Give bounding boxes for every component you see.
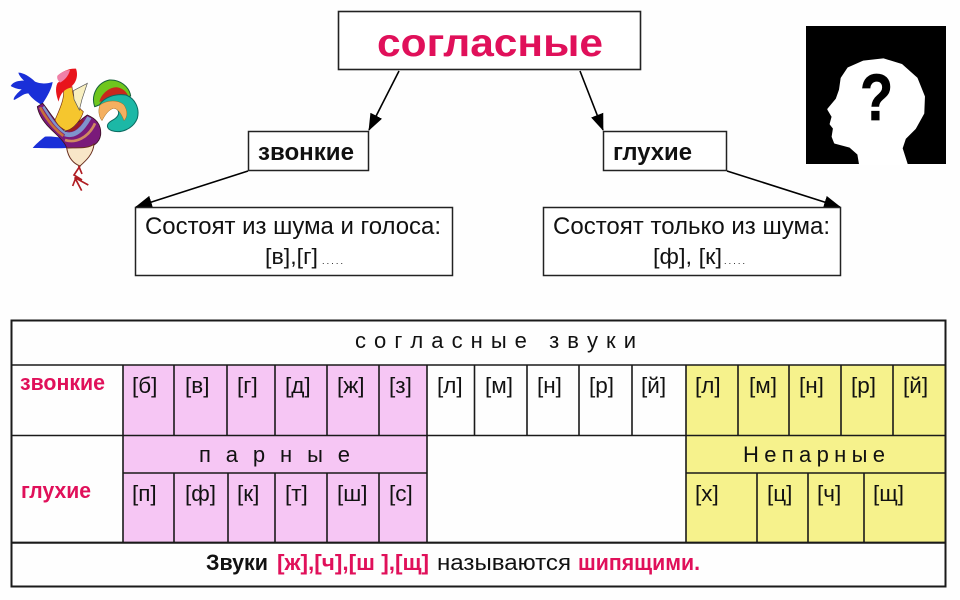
icon: rooster	[11, 69, 138, 191]
box: voiceless description: Состоят только из шума:	[553, 213, 830, 240]
voiced consonants row: [й]	[641, 373, 666, 398]
voiceless consonants row	[132, 481, 904, 506]
voiceless consonants row: [ц]	[767, 481, 792, 506]
title box: согласные	[377, 22, 603, 65]
box: voiced heading: звонкие	[258, 139, 354, 166]
arrow: voiced to description	[136, 171, 248, 207]
row label: voiced: звонкие	[20, 370, 105, 395]
footer note	[206, 550, 700, 575]
arrow: title to voiced	[369, 71, 399, 130]
yellow unpaired cells	[686, 365, 946, 543]
box: voiceless heading	[604, 132, 726, 170]
voiced consonants row: [ж]	[337, 373, 365, 398]
footer note: Звуки	[206, 550, 268, 575]
voiced consonants row: [л]	[695, 373, 721, 398]
box: voiceless description	[544, 208, 840, 276]
label: paired: п а р н ы е	[199, 442, 350, 467]
arrow: voiceless to description	[727, 171, 840, 207]
footer note: [ж],[ч],[ш ],[щ]	[277, 550, 429, 575]
icon: head silhouette with question mark	[806, 26, 946, 164]
voiced consonants row: [м]	[485, 373, 513, 398]
voiceless consonants row: [ш]	[337, 481, 368, 506]
voiced consonants row: [р]	[851, 373, 876, 398]
voiced consonants row: [й]	[903, 373, 928, 398]
voiceless consonants row: [к]	[237, 481, 259, 506]
voiceless consonants row: [ф]	[185, 481, 216, 506]
footer note: шипящими.	[578, 550, 700, 575]
voiceless consonants row: [х]	[695, 481, 719, 506]
voiced consonants row: [м]	[749, 373, 777, 398]
voiceless consonants row: [щ]	[873, 481, 904, 506]
box: voiced description: .....	[322, 256, 343, 266]
voiced consonants row: [л]	[437, 373, 463, 398]
title box	[338, 12, 640, 70]
voiced consonants row: [з]	[389, 373, 412, 398]
table heading: с о г л а с н ы е з в у к и	[355, 328, 636, 353]
voiceless consonants row: [ч]	[817, 481, 841, 506]
voiceless consonants row: [п]	[132, 481, 157, 506]
pink paired cells	[123, 365, 427, 543]
box: voiceless heading: глухие	[613, 139, 692, 166]
icon: head silhouette with question mark: ?	[860, 60, 893, 134]
voiced consonants row: [н]	[537, 373, 562, 398]
box: voiced description	[136, 208, 452, 276]
voiced consonants row: [г]	[237, 373, 258, 398]
box: voiced heading	[248, 132, 368, 170]
voiced consonants row: [б]	[132, 373, 157, 398]
box: voiced description: [в],[г]	[265, 244, 318, 269]
box: voiceless description: [ф], [к]	[653, 244, 722, 269]
row label: voiceless: глухие	[21, 478, 91, 503]
voiced consonants row	[132, 373, 928, 398]
box: voiced description: Состоят из шума и голоса:	[145, 213, 441, 240]
box: voiceless description: .....	[724, 256, 745, 266]
voiced consonants row: [д]	[285, 373, 311, 398]
table grid	[11, 320, 946, 586]
voiceless consonants row: [т]	[285, 481, 308, 506]
voiced consonants row: [н]	[799, 373, 824, 398]
arrow: title to voiceless	[580, 71, 603, 130]
voiceless consonants row: [с]	[389, 481, 413, 506]
footer note: называются	[437, 550, 571, 575]
table: consonant sounds	[11, 320, 946, 586]
voiced consonants row: [в]	[185, 373, 209, 398]
label: unpaired: Н е п а р н ы е	[743, 442, 885, 467]
voiced consonants row: [р]	[589, 373, 614, 398]
